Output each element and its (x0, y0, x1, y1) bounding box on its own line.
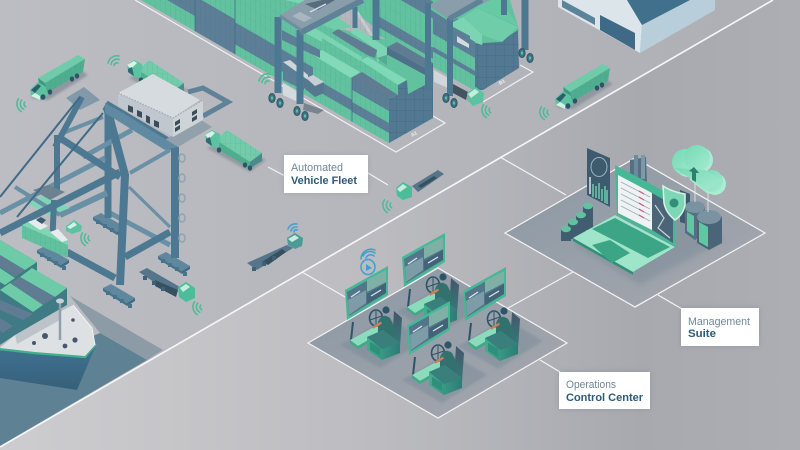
wifi icons (14, 56, 550, 315)
yard lot markings (135, 0, 533, 152)
connector lines (268, 157, 682, 372)
water and quay (0, 296, 163, 446)
analytics panel (587, 148, 610, 207)
containers: corridor between stacks (355, 7, 372, 36)
operator workstations (340, 233, 543, 403)
workstation left (340, 266, 425, 368)
flatbed truck: middle (247, 233, 303, 271)
management suite shadow (575, 200, 725, 285)
truck under crane 2 (453, 84, 484, 106)
truck: by the crane platform (205, 130, 266, 172)
containers: stack A (141, 0, 433, 143)
label: Automated Vehicle Fleet: Automated (291, 162, 343, 174)
platform: management suite (505, 158, 765, 307)
top surfaces of stack A (285, 0, 387, 78)
label: Operations Control Center: Control Center (566, 392, 644, 404)
servers (680, 190, 722, 250)
cylinder chart (561, 203, 593, 241)
workstation front (402, 301, 487, 403)
container crane 2: rear legs (504, 0, 533, 63)
rear server (630, 155, 647, 182)
cloud upload icon (672, 145, 726, 212)
laptop (573, 165, 675, 275)
vessel (0, 240, 96, 390)
label: Automated Vehicle Fleet (284, 155, 368, 193)
label: Operations Control Center: Operations (566, 379, 616, 391)
icon: remote signal over workstation (361, 249, 375, 274)
workstation back (397, 233, 482, 335)
containers: stack B (340, 0, 519, 91)
truck: right of yard (555, 64, 613, 109)
quay crane (0, 87, 190, 308)
crane control building (118, 74, 203, 137)
truck and container under crane (22, 217, 82, 270)
label: Automated Vehicle Fleet: Vehicle Fleet (291, 175, 357, 187)
yard lot markings: B1 (498, 78, 507, 87)
label: Management Suite: Suite (688, 328, 716, 340)
wifi icon: blue on flatbed (288, 224, 297, 232)
label: Operations Control Center (559, 372, 650, 409)
crane wheels (269, 93, 283, 108)
flatbed truck: by the divider (396, 170, 444, 200)
platform: operations control center (308, 268, 567, 418)
warehouse (558, 0, 715, 53)
yard lot markings: A1 (410, 130, 419, 139)
container crane 2 (428, 0, 490, 108)
truck: behind building (127, 60, 188, 102)
label: Management Suite: Management (688, 316, 750, 328)
flatbed truck: lower crane (139, 268, 195, 302)
workstation right (458, 267, 543, 369)
stack A upper blocks (351, 42, 433, 98)
container crane 1 (269, 0, 376, 121)
shield (663, 186, 685, 220)
stack A right face (389, 63, 433, 143)
crane building platform and walkway (105, 88, 228, 150)
label: Management Suite (681, 308, 759, 346)
truck: top left (30, 55, 88, 100)
